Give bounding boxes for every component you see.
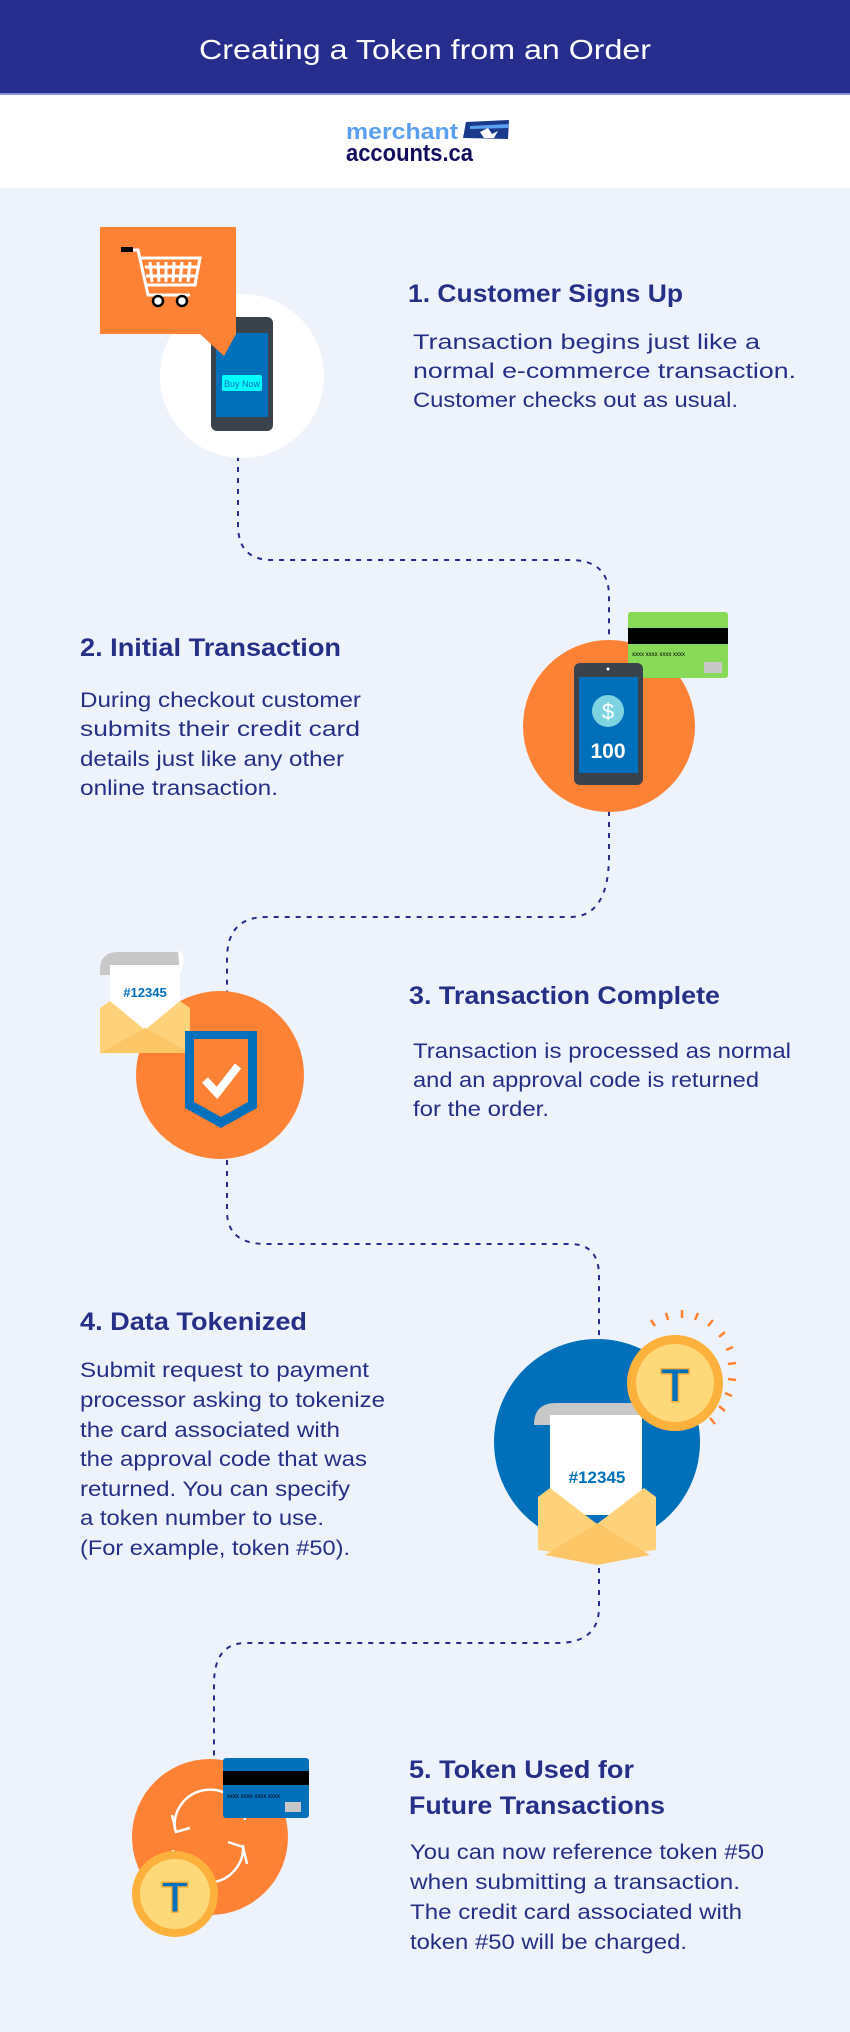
step 1 text: Customer checks out as usual.	[413, 389, 738, 412]
logo: accounts.ca	[346, 140, 474, 167]
step 2 icon: phone with $100 and green card: xxxx xxxx xxxx xxxx	[632, 652, 685, 658]
step 5 icon: refresh circle with card and coin: T	[162, 1873, 189, 1922]
logo	[346, 119, 509, 167]
step 5 text: 5. Token Used for	[409, 1756, 634, 1784]
step 4 text: the card associated with	[80, 1419, 340, 1442]
step 2 icon: phone with $100 and green card: 100	[590, 740, 626, 763]
step 1 text: normal e-commerce transaction.	[413, 360, 796, 383]
logo band	[0, 95, 850, 188]
step 2 text: details just like any other	[80, 748, 344, 771]
header bar	[0, 0, 850, 95]
step 4 text: Submit request to payment	[80, 1359, 369, 1382]
icon: token coin	[627, 1335, 723, 1431]
step 4 text: the approval code that was	[80, 1448, 367, 1471]
step 3 icon: envelope and shield: #12345	[123, 985, 167, 1000]
step 2 text: online transaction.	[80, 777, 278, 800]
step 3 text: and an approval code is returned	[413, 1069, 759, 1092]
step 1 icon: phone with cart bubble: Buy Now	[224, 379, 261, 389]
icon: sun rays	[651, 1310, 736, 1424]
step 1 text: Transaction begins just like a	[413, 331, 760, 354]
step 5 text: You can now reference token #50	[410, 1841, 764, 1864]
step 3 text: 3. Transaction Complete	[409, 982, 720, 1010]
step 5 icon: refresh circle with card and coin	[132, 1758, 309, 1937]
step 4 icon: envelope on blue circle with token coin: #12345	[569, 1468, 625, 1487]
step 5 icon: refresh circle with card and coin: xxxx xxxx xxxx xxxx	[227, 1794, 280, 1800]
logo: merchant	[346, 119, 459, 144]
step 1 text	[408, 280, 796, 412]
step 5 text: when submitting a transaction.	[409, 1871, 740, 1894]
step 4 text: (For example, token #50).	[80, 1537, 350, 1560]
step 4 text: processor asking to tokenize	[80, 1389, 385, 1412]
step 3 icon: envelope and shield	[100, 950, 304, 1159]
step 5 text	[409, 1756, 764, 1954]
step 4 text	[80, 1308, 385, 1560]
step 4 text: a token number to use.	[80, 1507, 324, 1530]
icon: shield	[185, 1031, 257, 1128]
step 4 text: 4. Data Tokenized	[80, 1308, 307, 1336]
step 2 icon: phone with $100 and green card: $	[602, 699, 614, 724]
step 2 icon: phone with $100 and green card	[523, 612, 728, 812]
step 3 text	[409, 982, 791, 1121]
step 1 icon: phone with cart bubble	[100, 227, 324, 458]
step 5 text: token #50 will be charged.	[410, 1931, 687, 1954]
step 3 text: for the order.	[413, 1098, 549, 1121]
step 1 text: 1. Customer Signs Up	[408, 280, 683, 308]
step 3 text: Transaction is processed as normal	[413, 1040, 791, 1063]
step 2 text: submits their credit card	[80, 718, 360, 741]
title: Creating a Token from an Order	[199, 34, 651, 65]
step 4 text: returned. You can specify	[80, 1478, 351, 1501]
step 4 icon: envelope on blue circle with token coin: T	[660, 1360, 690, 1413]
step 5 text: The credit card associated with	[410, 1901, 742, 1924]
dotted connector path	[214, 456, 609, 1760]
step 5 text: Future Transactions	[409, 1792, 665, 1820]
step 2 text	[80, 634, 361, 800]
icon: cart	[122, 250, 200, 295]
step 2 text: During checkout customer	[80, 689, 361, 712]
step 2 text: 2. Initial Transaction	[80, 634, 341, 662]
step 4 icon: envelope on blue circle with token coin	[494, 1310, 736, 1565]
